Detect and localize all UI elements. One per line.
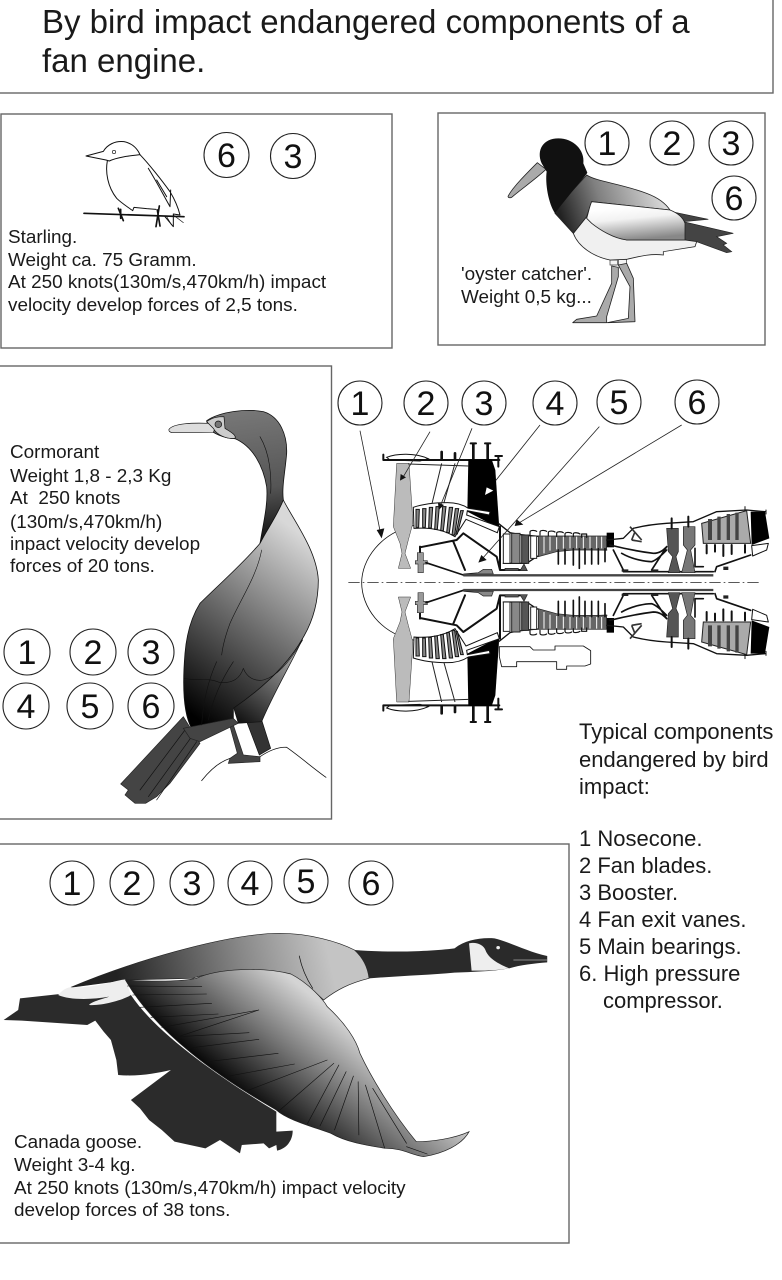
- icon: starling bird: [84, 142, 184, 227]
- cormorant text: (130m/s,470km/h): [10, 512, 162, 533]
- text block: typical components list: 4 Fan exit vanes.: [579, 907, 747, 932]
- oyster catcher text: 'oyster catcher'.: [461, 264, 592, 285]
- goose text: Weight 3-4 kg.: [14, 1155, 135, 1176]
- cormorant text: [10, 442, 200, 577]
- number markers: 3: [142, 634, 160, 672]
- title box: [0, 0, 773, 93]
- number markers: [338, 380, 719, 425]
- number markers: 3: [722, 125, 740, 163]
- cormorant text: Cormorant: [10, 442, 100, 463]
- panel: oyster catcher: [438, 113, 765, 345]
- text block: typical components list: 3 Booster.: [579, 880, 678, 905]
- goose text: Canada goose.: [14, 1132, 142, 1153]
- cormorant text: forces of 20 tons.: [10, 556, 155, 577]
- text block: typical components list: [579, 719, 773, 1013]
- goose text: develop forces of 38 tons.: [14, 1200, 230, 1221]
- number markers: 1: [598, 125, 616, 163]
- cormorant text: At 250 knots: [10, 488, 120, 509]
- engine lower half: [383, 590, 769, 722]
- number markers: [204, 132, 316, 178]
- engine cross-section diagram: [338, 380, 769, 722]
- number markers: [3, 629, 174, 729]
- text block: typical components list: endangered by bird: [579, 747, 769, 772]
- arrows: [360, 425, 682, 563]
- number markers: 2: [417, 385, 435, 423]
- number markers: 5: [81, 688, 99, 726]
- nosecone: [362, 526, 413, 640]
- text block: typical components list: 2 Fan blades.: [579, 853, 712, 878]
- number markers: 5: [610, 384, 628, 422]
- number markers: 5: [297, 863, 315, 901]
- goose text: At 250 knots (130m/s,470km/h) impact velocity: [14, 1178, 406, 1199]
- number markers: [585, 121, 756, 220]
- gearbox: [499, 646, 591, 669]
- number markers: 4: [546, 385, 564, 423]
- number markers: 1: [18, 634, 36, 672]
- icon: oyster catcher bird: [508, 138, 733, 323]
- number markers: 3: [183, 865, 201, 903]
- text block: typical components list: impact:: [579, 774, 650, 799]
- number markers: 4: [241, 865, 259, 903]
- number markers: 4: [17, 688, 35, 726]
- number markers: 3: [475, 385, 493, 423]
- starling text: [8, 227, 327, 316]
- panel: cormorant: [0, 366, 332, 819]
- center line: [348, 582, 761, 584]
- cormorant text: inpact velocity develop: [10, 534, 200, 555]
- icon: canada goose bird: [4, 933, 547, 1157]
- title box: fan engine.: [42, 42, 205, 79]
- number markers: 6: [217, 137, 236, 175]
- number markers: 6: [688, 384, 706, 422]
- panel: starling: [1, 114, 392, 348]
- text block: typical components list: 1 Nosecone.: [579, 826, 703, 851]
- starling text: At 250 knots(130m/s,470km/h) impact: [8, 272, 327, 293]
- starling text: Weight ca. 75 Gramm.: [8, 250, 197, 271]
- cormorant text: Weight 1,8 - 2,3 Kg: [10, 466, 171, 487]
- number markers: 3: [284, 138, 302, 176]
- number markers: [50, 859, 393, 905]
- text block: typical components list: 6. High pressure: [579, 961, 740, 986]
- icon: cormorant bird: [121, 410, 326, 803]
- oyster catcher text: [461, 264, 592, 308]
- number markers: 2: [123, 865, 141, 903]
- text block: typical components list: compressor.: [603, 988, 723, 1013]
- starling text: Starling.: [8, 227, 77, 248]
- number markers: 6: [725, 180, 743, 218]
- text block: typical components list: 5 Main bearings.: [579, 934, 742, 959]
- text block: typical components list: Typical components: [579, 719, 773, 744]
- panel: canada goose: [0, 844, 569, 1243]
- goose text: [14, 1132, 406, 1221]
- title box: By bird impact endangered components of a: [42, 3, 690, 40]
- engine upper half: [383, 443, 769, 575]
- number markers: 6: [362, 865, 380, 903]
- oyster catcher text: Weight 0,5 kg...: [461, 287, 592, 308]
- number markers: 2: [84, 634, 102, 672]
- number markers: 1: [63, 865, 81, 903]
- starling text: velocity develop forces of 2,5 tons.: [8, 295, 298, 316]
- number markers: 2: [663, 125, 681, 163]
- number markers: 6: [142, 688, 160, 726]
- number markers: 1: [351, 385, 369, 423]
